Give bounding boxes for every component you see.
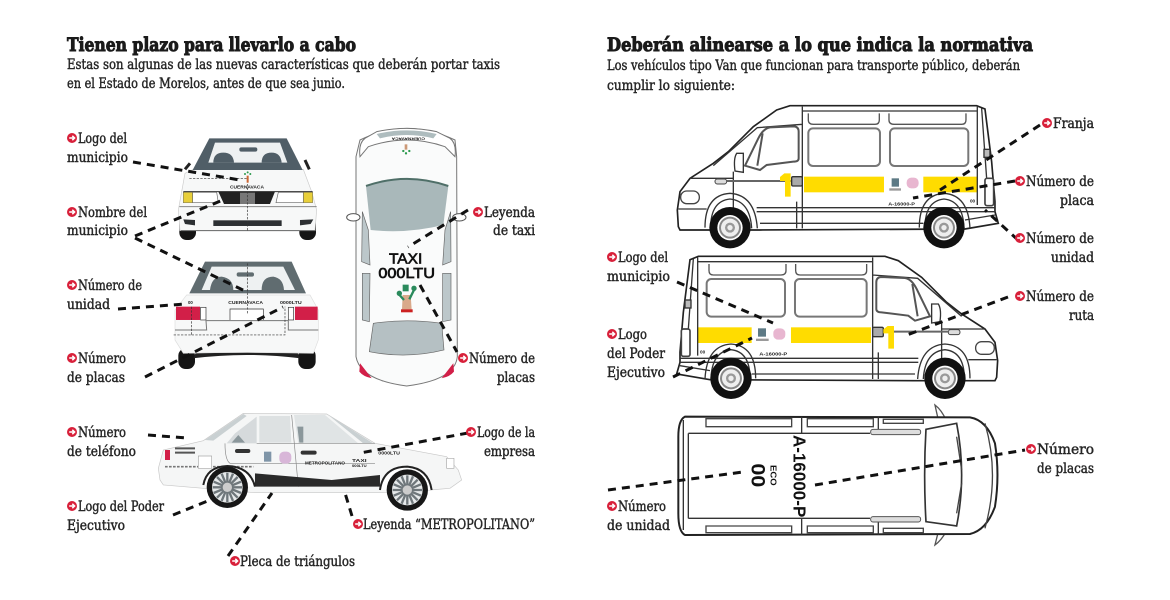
car rear view: CUERNAVACA	[228, 300, 264, 305]
labels: van: Número de	[1026, 289, 1094, 305]
car top view: TAXI	[389, 252, 422, 268]
heading: right panel: Deberán alinearse a lo que indica la normativa	[607, 34, 1033, 56]
labels: taxi: Pleca de triángulos	[240, 554, 355, 570]
labels: taxi: Número de	[78, 278, 142, 294]
car top view: CUERNAVACA	[391, 137, 425, 141]
car top view: 000LTU	[378, 266, 435, 282]
car side view: METROPOLITANO	[305, 460, 345, 465]
labels: van: unidad	[1051, 250, 1094, 266]
van top view: A-16000-P	[789, 435, 809, 517]
labels: taxi: Número	[78, 425, 126, 441]
labels: van: placa	[1060, 193, 1094, 209]
labels: taxi: Nombre del	[78, 205, 147, 221]
car side view: 0000LTU	[378, 451, 401, 456]
car rear view	[173, 262, 318, 369]
car side view: 000LTU	[352, 463, 367, 468]
labels: van: de unidad	[607, 518, 670, 534]
labels: van: Franja	[1053, 116, 1094, 132]
labels: taxi: placas	[497, 370, 535, 386]
intro text: right panel: cumplir lo siguiente:	[607, 78, 735, 94]
labels: van: municipio	[607, 269, 670, 285]
intro text: right panel	[607, 58, 1020, 94]
labels: taxi: unidad	[67, 297, 110, 313]
labels: van: Logo del	[618, 250, 668, 266]
van top view	[678, 405, 997, 545]
labels: taxi: Leyenda	[484, 205, 535, 221]
labels: taxi: Logo del	[78, 131, 127, 147]
van side view facing right: 00	[700, 350, 706, 355]
labels: taxi: de taxi	[493, 223, 536, 239]
car top view	[347, 128, 466, 386]
labels: van: Ejecutivo	[607, 365, 665, 381]
labels: taxi: de teléfono	[67, 444, 136, 460]
intro text: left panel: Estas son algunas de las nuevas características que deberán portar taxis	[67, 57, 500, 73]
van top view: ECO	[768, 465, 778, 486]
labels: taxi	[67, 131, 536, 570]
intro text: right panel: Los vehículos tipo Van que funcionan para transporte público, deberán	[607, 58, 1020, 74]
labels: van: Número	[1037, 442, 1094, 458]
labels: taxi: municipio	[67, 150, 128, 166]
labels: taxi: Número de	[469, 351, 535, 367]
callout lines: van	[608, 125, 1040, 490]
labels: taxi: Ejecutivo	[67, 518, 125, 534]
labels: taxi: Número	[78, 351, 126, 367]
labels: van: Número de	[1026, 231, 1094, 247]
labels: taxi: Logo del Poder	[78, 499, 164, 515]
callout lines: taxi	[118, 162, 468, 556]
van side view facing left: 00	[970, 199, 976, 204]
labels: taxi: de placas	[67, 370, 125, 386]
intro text: left panel	[67, 57, 500, 92]
labels: van: Logo	[618, 327, 647, 343]
van side view facing right: A-16000-P	[759, 351, 787, 356]
labels: van: de placas	[1037, 461, 1094, 477]
van top view: 00	[746, 463, 767, 487]
labels: van: Número de	[1026, 174, 1094, 190]
car side view	[158, 413, 462, 511]
labels: van: del Poder	[607, 346, 665, 362]
car front view: CUERNAVACA	[230, 184, 265, 189]
van side view facing left	[677, 106, 998, 248]
labels: van: Número	[618, 499, 666, 515]
car side view: TAXI	[352, 458, 367, 463]
labels: taxi: Leyenda “METROPOLITANO”	[363, 517, 535, 533]
labels: van	[607, 116, 1094, 534]
heading: left panel: Tienen plazo para llevarlo a cabo	[67, 34, 356, 56]
van side view facing left: A-16000-P	[888, 202, 915, 207]
car rear view: 0000LTU	[280, 300, 302, 305]
van side view facing right	[677, 256, 998, 399]
labels: van: ruta	[1069, 308, 1094, 324]
labels: taxi: municipio	[67, 223, 128, 239]
labels: taxi: Logo de la	[477, 425, 535, 441]
labels: taxi: empresa	[484, 444, 535, 460]
intro text: left panel: en el Estado de Morelos, antes de que sea junio.	[67, 76, 345, 92]
car front view	[178, 138, 317, 240]
car rear view: 00	[188, 300, 193, 305]
